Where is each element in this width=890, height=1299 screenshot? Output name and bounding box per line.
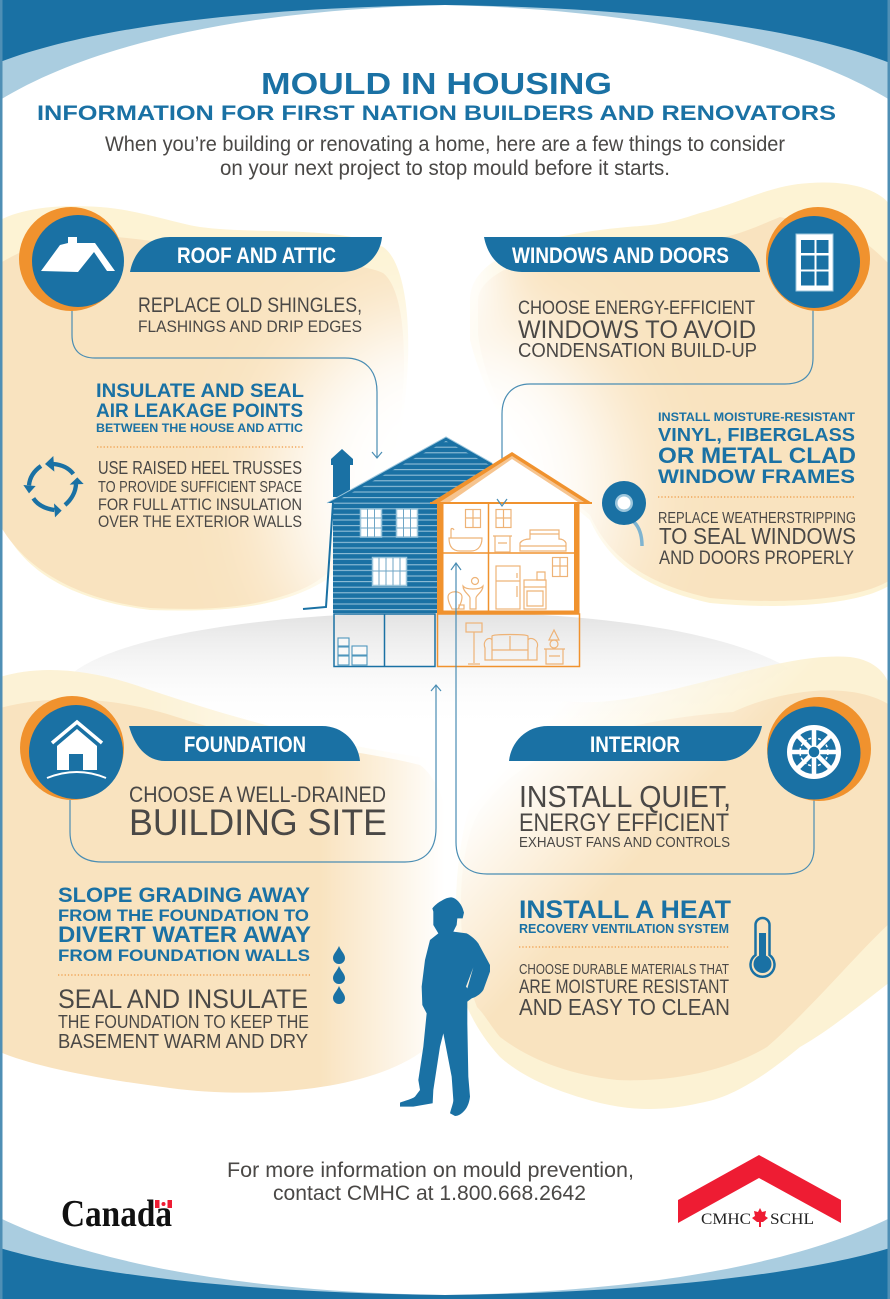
icon: weatherstrip tape [602,481,646,546]
storage boxes [338,638,367,665]
panel: roof and attic [19,207,382,531]
footer contact text: contact CMHC at 1.800.668.2642 [273,1182,586,1205]
banner: roof and attic: ROOF AND ATTIC [177,243,336,268]
heading: slope grading: FROM THE FOUNDATION TO [58,907,309,925]
heading: moisture-resistant frames: INSTALL MOISTURE-RESISTANT [658,410,856,424]
heading: insulate and seal: INSULATE AND SEAL [96,380,304,402]
connector: roof to house [72,310,382,458]
footer contact text [227,1159,634,1205]
text: energy-efficient windows [518,298,757,362]
heading: moisture-resistant frames: WINDOW FRAMES [658,467,855,488]
text: weatherstripping [658,510,856,569]
text: weatherstripping: AND DOORS PROPERLY [659,548,854,569]
worker silhouette [400,897,490,1116]
orange half of house [430,452,592,666]
panel: windows and doors [484,207,870,569]
banner: windows and doors: WINDOWS AND DOORS [512,243,729,268]
heading: insulate and seal: AIR LEAKAGE POINTS [96,401,303,422]
heading: slope grading: SLOPE GRADING AWAY [58,884,310,907]
text: replace old shingles: REPLACE OLD SHINGLES, [138,294,362,317]
text: seal and insulate: SEAL AND INSULATE [58,984,308,1014]
intro text: When you’re building or renovating a home, here are a few things to consider [105,133,785,156]
icon: recycling arrows [23,456,84,517]
text: install quiet fans: EXHAUST FANS AND CONTROLS [519,835,730,851]
text: seal and insulate [58,984,309,1053]
text: seal and insulate: THE FOUNDATION TO KEEP THE [58,1012,309,1032]
connector: windows to house [502,310,813,506]
text: durable materials: AND EASY TO CLEAN [519,994,730,1020]
heading: moisture-resistant frames: VINYL, FIBERGLASS [658,425,855,445]
icon: house [20,696,124,800]
banner: roof and attic [130,237,382,272]
text: energy-efficient windows: CONDENSATION BUILD-UP [518,340,757,362]
banner: interior [509,726,762,761]
heading: slope grading: FROM FOUNDATION WALLS [58,946,310,965]
panel: foundation [20,696,387,1053]
connector: interior to house [451,563,814,874]
icon: window [766,207,870,311]
icon: thermometer [750,918,774,977]
text: raised heel trusses: USE RAISED HEEL TRUSSES [98,458,302,478]
heading: heat recovery ventilation: RECOVERY VENTILATION SYSTEM [519,921,729,936]
connector: foundation to house [70,685,441,862]
banner: foundation [129,726,360,761]
text: replace old shingles: FLASHINGS AND DRIP EDGES [138,318,362,336]
text: energy-efficient windows: WINDOWS TO AVOID [518,316,756,344]
heading: slope grading: DIVERT WATER AWAY [58,922,311,947]
furniture [448,510,568,664]
footer contact text: For more information on mould prevention, [227,1159,634,1182]
intro text [105,133,785,180]
icon: roof [19,207,124,311]
heading: slope grading [58,884,311,965]
background blob: bottom left [0,670,459,1093]
heading: heat recovery ventilation [519,896,731,936]
subtitle: INFORMATION FOR FIRST NATION BUILDERS AND RENOVATORS [37,101,836,125]
icon: exhaust fan [767,697,871,801]
banner: foundation: FOUNDATION [184,732,306,757]
text: building site: BUILDING SITE [129,802,387,843]
logo: Canada wordmark: Canada [61,1193,172,1235]
heading: moisture-resistant frames: OR METAL CLAD [658,443,856,468]
intro text: on your next project to stop mould before it starts. [220,157,670,180]
banner: windows and doors [484,237,760,272]
text: seal and insulate: BASEMENT WARM AND DRY [58,1031,308,1053]
banner: interior: INTERIOR [590,732,680,757]
background blob: top left [0,206,408,611]
arrow: windows connector into house [497,499,507,506]
top banner swoosh [0,0,890,100]
bottom banner swoosh [0,1218,890,1299]
heading: heat recovery ventilation: INSTALL A HEAT [519,896,731,924]
title: MOULD IN HOUSING [261,66,612,101]
text: weatherstripping: TO SEAL WINDOWS [659,523,856,549]
logo: CMHC SCHL: SCHL [770,1211,814,1228]
text: energy-efficient windows: CHOOSE ENERGY-EFFICIENT [518,298,755,319]
text: raised heel trusses: FOR FULL ATTIC INSULATION [98,496,302,514]
text: raised heel trusses [98,458,302,531]
background blob: top right [470,182,890,606]
panel: interior [509,697,871,1020]
text: raised heel trusses: TO PROVIDE SUFFICIENT SPACE [98,479,302,496]
grey ground ellipse [74,612,795,735]
text: durable materials: ARE MOISTURE RESISTANT [519,977,729,998]
text: durable materials [519,962,730,1020]
heading: insulate and seal: BETWEEN THE HOUSE AND ATTIC [96,421,303,435]
heading: insulate and seal [96,380,304,435]
text: install quiet fans [519,779,731,851]
text: building site: CHOOSE A WELL-DRAINED [129,782,386,807]
icon: water drops [333,946,345,1004]
logo: CMHC SCHL [678,1155,841,1228]
text: replace old shingles [138,294,362,336]
blue half of house [303,437,500,666]
heading: moisture-resistant frames [658,410,856,488]
logo: CMHC SCHL: CMHC [701,1211,751,1228]
text: install quiet fans: INSTALL QUIET, [519,779,731,814]
text: raised heel trusses: OVER THE EXTERIOR WALLS [98,513,302,531]
background blob: bottom right [456,656,890,1109]
house illustration [303,437,814,874]
text: durable materials: CHOOSE DURABLE MATERIALS THAT [519,962,729,978]
text: building site [129,782,387,843]
text: install quiet fans: ENERGY EFFICIENT [519,809,729,837]
